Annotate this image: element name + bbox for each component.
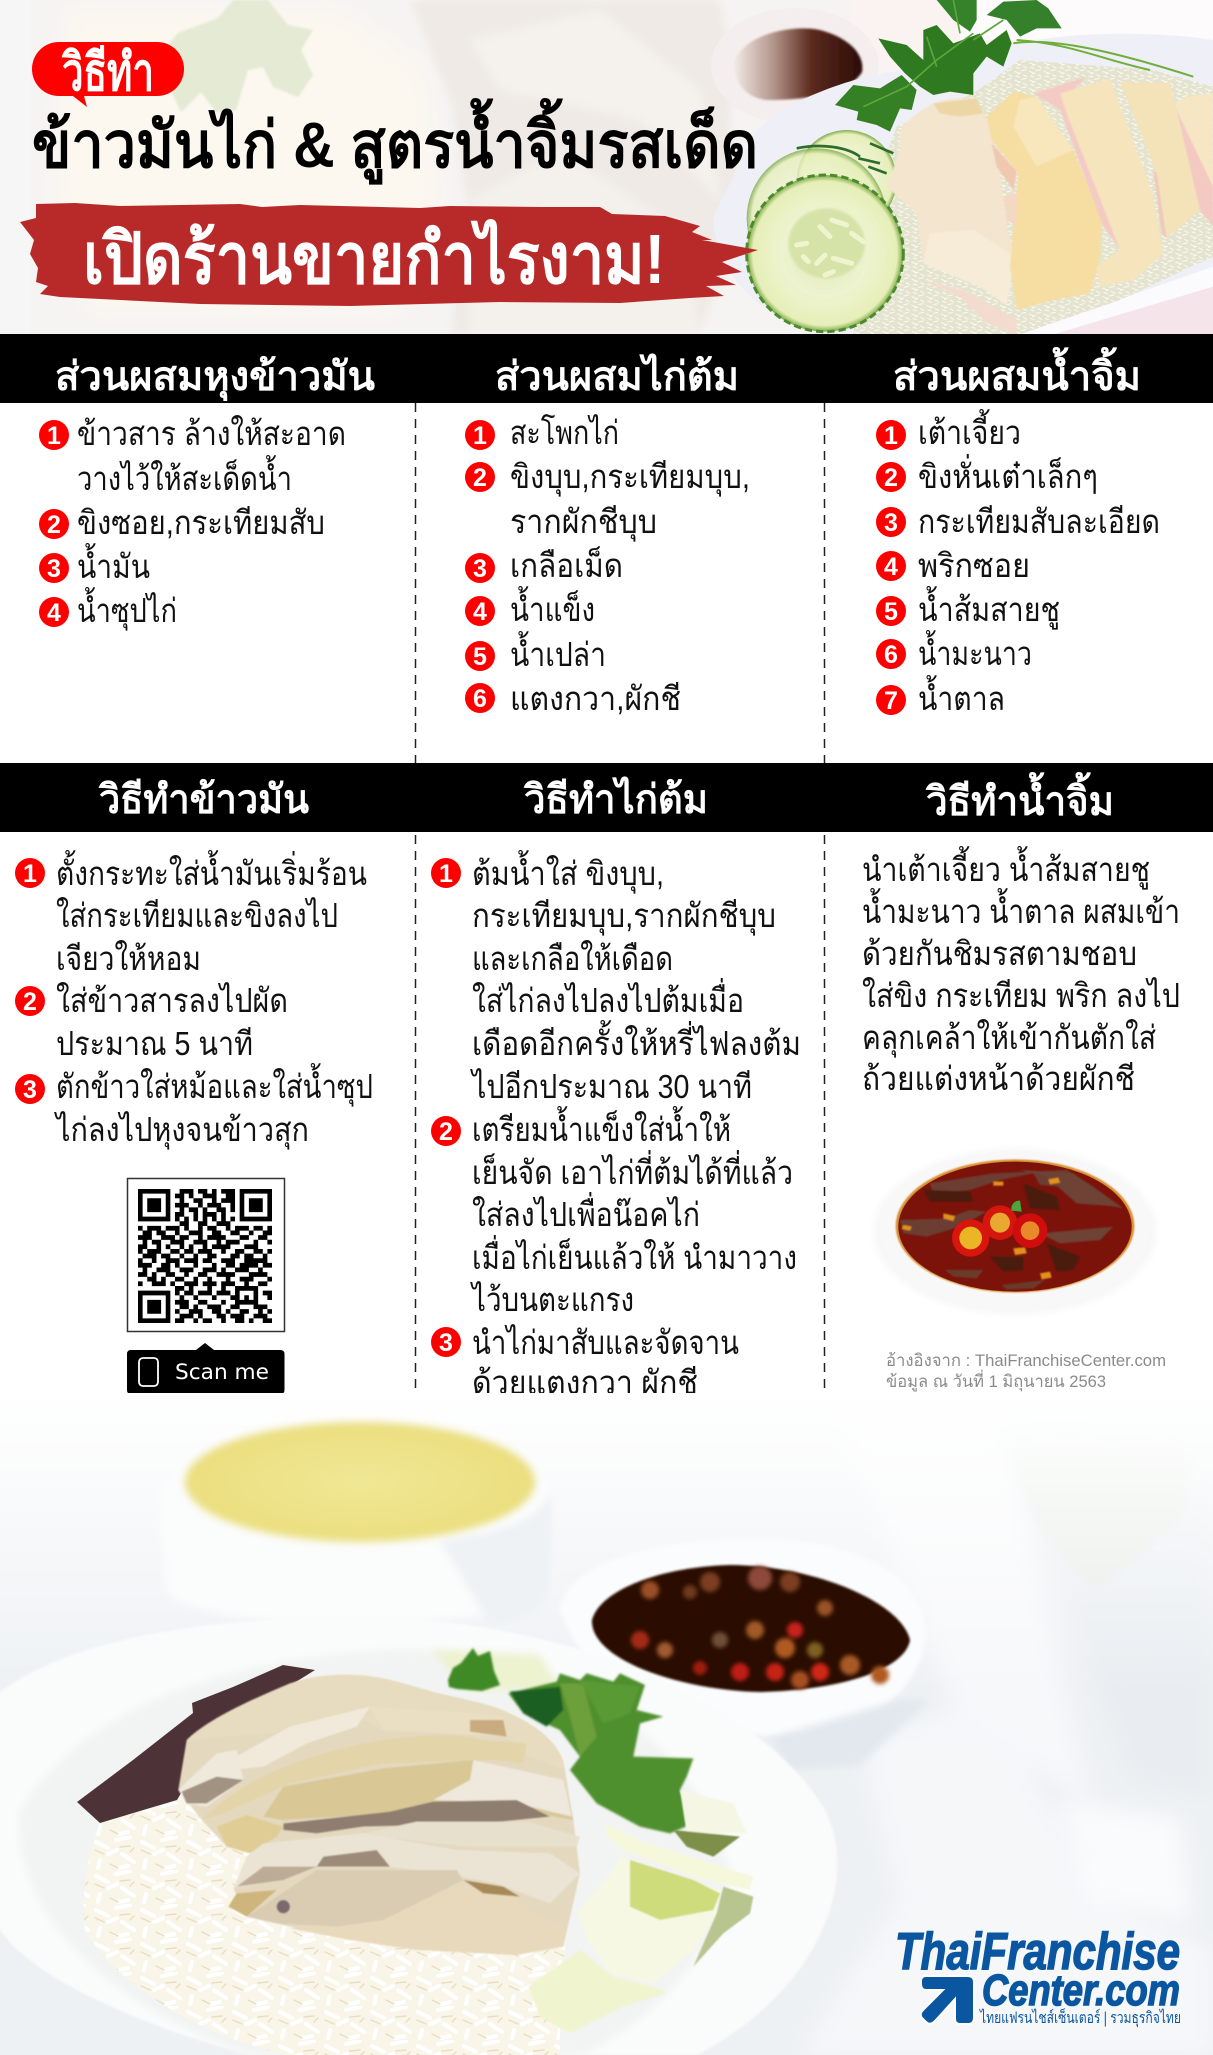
ingredients list: chicken: 2 (473, 464, 487, 492)
ThaiFranchise Center logo (895, 1923, 1181, 2028)
blood tofu (77, 1665, 315, 1823)
ingredients list: chicken (465, 414, 750, 717)
steps: dipping sauce: นำเต้าเจี้ยว น้ำส้มสายชู (862, 846, 1150, 890)
broth on plate (430, 1650, 560, 1690)
steps: rice (15, 850, 373, 1150)
ingredients list: chicken: น้ำเปล่า (510, 631, 606, 673)
source credit: ข้อมูล ณ วันที่ 1 มิถุนายน 2563 (886, 1369, 1106, 1392)
steps: rice: 3 (23, 1076, 37, 1104)
steps: rice: ตั้งกระทะใส่น้ำมันเริ่มร้อน (56, 850, 367, 892)
ingredients list: dipping sauce: เต้าเจี้ยว (918, 409, 1021, 451)
steps: chicken: ต้มน้ำใส่ ขิงบุบ, (472, 850, 664, 894)
ingredients list: chicken: แตงกวา,ผักชี (510, 680, 681, 717)
steps: rice: ตักข้าวใส่หม้อและใส่น้ำซุป (56, 1063, 373, 1107)
ingredients list: dipping sauce: 1 (884, 422, 898, 450)
ingredients list: dipping sauce: 3 (884, 509, 898, 537)
ingredients header band (0, 334, 1213, 403)
soup bowl (160, 1422, 552, 1625)
ingredients header band: ส่วนผสมน้ำจิ้ม (893, 347, 1141, 399)
header photo: chicken rice plate (0, 0, 1213, 334)
ingredients list: rice: วางไว้ให้สะเด็ดน้ำ (77, 455, 292, 497)
steps: chicken: เย็นจัด เอาไก่ที่ต้มได้ที่แล้ว (472, 1150, 793, 1191)
icon: logo arrow (921, 1976, 974, 2024)
steps: chicken: เตรียมน้ำแข็งใส่น้ำให้ (472, 1106, 731, 1148)
ingredients list: dipping sauce: น้ำส้มสายชู (918, 586, 1060, 630)
ingredients list: dipping sauce: 7 (884, 687, 898, 715)
steps: chicken: เดือดอีกครั้งให้หรี่ไฟลงต้ม (472, 1020, 801, 1062)
ingredients list: dipping sauce: น้ำมะนาว (918, 630, 1032, 672)
ingredients list: rice: 1 (47, 422, 61, 450)
source credit: อ้างอิงจาก : ThaiFranchiseCenter.com (886, 1351, 1166, 1370)
ingredients list: rice (39, 415, 346, 631)
cucumbers (747, 130, 903, 332)
steps: chicken: ใส่ลงไปเพื่อน๊อคไก่ (472, 1192, 700, 1233)
steps: chicken: ไว้บนตะแกรง (469, 1281, 634, 1318)
steps: rice: 1 (23, 860, 37, 888)
washed chicken (410, 0, 750, 334)
steps: chicken: นำไก่มาสับและจัดจาน (472, 1324, 739, 1361)
steps: rice: ไก่ลงไปหุงจนข้าวสุก (53, 1111, 309, 1150)
steps: chicken: 2 (439, 1118, 453, 1146)
ingredients list: chicken: 5 (473, 643, 487, 671)
dipping sauce bowl photo (873, 1149, 1157, 1314)
washed rice mound (55, 10, 440, 310)
steps: rice: 2 (23, 988, 37, 1016)
bottom photo: chicken rice set (0, 1393, 1213, 2055)
chicken slices (887, 77, 1213, 334)
parsley (835, 0, 1193, 132)
ingredients list: chicken: รากผักชีบุบ (510, 503, 657, 542)
ingredients list: rice: 4 (47, 599, 61, 627)
ingredients list: rice: ขิงซอย,กระเทียมสับ (77, 504, 325, 541)
steps: dipping sauce: ด้วยกันชิมรสตามชอบ (862, 935, 1137, 972)
ingredients list: chicken: ขิงบุบ,กระเทียมบุบ, (510, 458, 750, 497)
ingredients list: chicken: เกลือเม็ด (510, 546, 623, 584)
red brush banner (20, 203, 758, 306)
steps: chicken: และเกลือให้เดือด (472, 940, 673, 977)
ingredients list: rice: น้ำมัน (77, 543, 150, 585)
method header band: วิธีทำน้ำจิ้ม (925, 772, 1114, 824)
ingredients list: chicken: สะโพกไก่ (510, 414, 619, 451)
plate (713, 34, 1213, 333)
steps: rice: ประมาณ 5 นาที (56, 1025, 253, 1062)
steps: chicken: เมื่อไก่เย็นแล้วให้ นำมาวาง (472, 1235, 797, 1276)
cucumber (528, 1790, 753, 2033)
steps: dipping sauce (862, 846, 1180, 1097)
ingredients list: dipping sauce: 4 (884, 553, 898, 581)
ingredients list: dipping sauce: กระเทียมสับละเอียด (918, 503, 1160, 540)
steps: chicken: กระเทียมบุบ,รากผักชีบุบ (472, 897, 776, 936)
speech bubble label: วิธีทำ (61, 44, 154, 102)
ingredients list: chicken: 1 (473, 422, 487, 450)
ingredients list: dipping sauce: 6 (884, 641, 898, 669)
steps: dipping sauce: คลุกเคล้าให้เข้ากันตักใส่ (862, 1019, 1156, 1058)
ingredients list: rice: 3 (47, 555, 61, 583)
ingredients list: rice: ข้าวสาร ล้างให้สะอาด (77, 415, 346, 452)
red brush banner: เปิดร้านขายกำไรงาม! (83, 218, 665, 298)
ingredients list: dipping sauce (876, 409, 1160, 717)
dip bowl (560, 1539, 930, 1770)
QR code (128, 1178, 284, 1332)
source credit (886, 1351, 1166, 1392)
ingredients list: rice: น้ำซุปไก่ (77, 587, 177, 631)
scan me button (127, 1343, 284, 1394)
steps: chicken: 3 (439, 1329, 453, 1357)
scan me button: Scan me (175, 1360, 269, 1384)
table cloth (0, 1393, 1213, 2055)
rice (853, 60, 1213, 334)
ingredients list: chicken: น้ำแข็ง (510, 586, 595, 628)
ingredients list: dipping sauce: ขิงหั่นเต๋าเล็กๆ (918, 454, 1098, 495)
ingredients list: chicken: 4 (473, 598, 487, 626)
plate (0, 1617, 837, 2055)
ingredients list: dipping sauce: พริกซอย (918, 547, 1030, 584)
ingredients list: dipping sauce: 5 (884, 598, 898, 626)
method header band: วิธีทำข้าวมัน (98, 778, 309, 822)
steps: chicken: ด้วยแตงกวา ผักชี (472, 1364, 698, 1401)
steps: chicken: ใส่ไก่ลงไปลงไปต้มเมื่อ (472, 978, 744, 1019)
parsley (448, 1648, 693, 1833)
chicken slices (178, 1675, 580, 1955)
steps: dipping sauce: ถ้วยแต่งหน้าด้วยผักชี (862, 1060, 1135, 1097)
washed parsley (166, 0, 313, 112)
ingredients header band: ส่วนผสมหุงข้าวมัน (55, 355, 375, 402)
steps: rice: ใส่ข้าวสารลงไปผัด (56, 982, 288, 1019)
ingredients list: chicken: 6 (473, 685, 487, 713)
method header band: วิธีทำไก่ต้ม (523, 776, 708, 822)
rice mound (84, 1760, 570, 2055)
ingredients list: dipping sauce: 2 (884, 464, 898, 492)
ingredients list: chicken: 3 (473, 555, 487, 583)
steps: rice: ใส่กระเทียมและขิงลงไป (56, 897, 338, 934)
title: ข้าวมันไก่ & สูตรน้ำจิ้มรสเด็ด (32, 98, 758, 185)
sauce bowl (711, 8, 879, 124)
dashed column dividers (416, 403, 824, 1393)
steps: chicken: ไปอีกประมาณ 30 นาที (469, 1068, 752, 1105)
steps: chicken: 1 (439, 860, 453, 888)
ingredients list: rice: 2 (47, 511, 61, 539)
method header band (0, 763, 1213, 832)
ingredients header band: ส่วนผสมไก่ต้ม (495, 353, 739, 399)
ingredients list: dipping sauce: น้ำตาล (918, 675, 1005, 717)
steps: rice: เจียวให้หอม (56, 940, 201, 977)
steps: chicken (431, 850, 801, 1401)
